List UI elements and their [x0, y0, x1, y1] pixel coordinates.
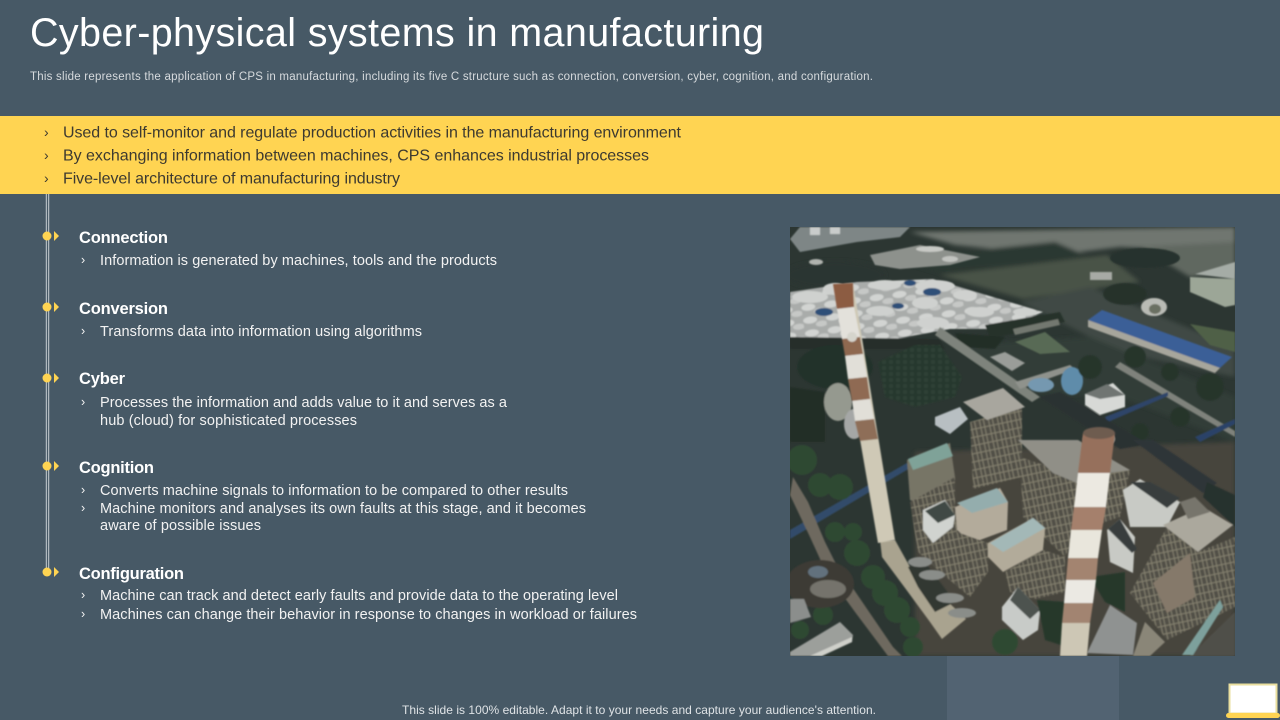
photo: aerial view of industrial plant	[785, 227, 1235, 657]
detail text: ›	[81, 395, 85, 409]
detail text: Machines can change their behavior in response to changes in workload or failures	[100, 607, 637, 623]
detail text: ›	[81, 501, 85, 515]
footer tinted rectangle	[947, 656, 1119, 720]
tall center block	[1020, 457, 1080, 557]
right trees	[1078, 346, 1224, 441]
section: cyber	[42, 370, 508, 429]
silo top rim	[1082, 436, 1116, 444]
lawn	[1015, 332, 1070, 354]
heading: Configuration	[79, 565, 184, 583]
heading: Connection	[79, 229, 168, 247]
left ground: tree clumps	[787, 445, 1018, 657]
key point 1: ›	[44, 124, 49, 140]
crane	[1182, 600, 1223, 655]
timeline marker	[42, 231, 59, 241]
detail text: Processes the information and adds value to it and serves as a	[100, 395, 508, 411]
white house with dark roof	[923, 500, 955, 543]
timeline marker	[42, 461, 59, 471]
filter house C	[988, 518, 1045, 572]
key point 1: Used to self-monitor and regulate production activities in the manufacturing environment	[63, 124, 682, 142]
blue roof	[1088, 310, 1232, 368]
heading: Cyber	[79, 370, 126, 388]
detail text: ›	[81, 324, 85, 338]
white house lower	[1002, 587, 1040, 640]
detail text: ›	[81, 607, 85, 621]
detail text: aware of possible issues	[100, 518, 261, 534]
detail text: Machine can track and detect early faults and provide data to the operating level	[100, 588, 618, 604]
key point 3: Five-level architecture of manufacturing industry	[63, 170, 400, 188]
forest block	[878, 345, 962, 407]
filter house B	[955, 488, 1008, 543]
timeline marker	[42, 302, 59, 312]
detail text: Information is generated by machines, tools and the products	[100, 253, 497, 269]
dark roof band	[1059, 393, 1139, 450]
timeline rail	[46, 194, 49, 572]
right white buildings	[1123, 479, 1180, 527]
warehouse roofs	[790, 227, 910, 252]
elevated flue duct	[880, 540, 966, 639]
heading: Cognition	[79, 459, 154, 477]
detail text: Transforms data into information using algorithms	[100, 324, 422, 340]
timeline marker	[42, 373, 59, 383]
dark green yard	[1037, 600, 1067, 647]
silver lower building	[1087, 605, 1137, 655]
small white building	[1085, 383, 1125, 415]
chimney right	[1060, 427, 1115, 656]
section: conversion	[42, 300, 422, 340]
title: Cyber-physical systems in manufacturing	[30, 11, 764, 55]
detail text	[81, 588, 637, 623]
panel: yellow key points band	[0, 116, 1280, 194]
subtitle: This slide represents the application of CPS in manufacturing, including its five C structure such as connection, conversion, cyber, cognition, and configuration.	[30, 71, 873, 83]
bale pile field	[790, 279, 1043, 345]
left sheds	[790, 599, 811, 623]
key point 2: ›	[44, 147, 49, 163]
footer note: This slide is 100% editable. Adapt it to your needs and capture your audience's attention.	[402, 703, 876, 717]
key point 2: By exchanging information between machines, CPS enhances industrial processes	[63, 148, 649, 164]
detail text: hub (cloud) for sophisticated processes	[100, 413, 357, 429]
section: connection	[42, 229, 497, 269]
support lattice	[910, 477, 988, 597]
detail text: Converts machine signals to information to be compared to other results	[100, 483, 568, 499]
detail text: ›	[81, 253, 85, 267]
plant building top right	[1190, 277, 1235, 307]
scrap yard	[786, 560, 854, 608]
detail text	[81, 483, 586, 534]
blue tanks	[1061, 367, 1083, 395]
icon: laptop	[1226, 684, 1280, 718]
left path	[790, 477, 902, 656]
section: cognition	[42, 459, 586, 534]
tree rows by the piles	[790, 337, 945, 349]
filter house A	[906, 442, 956, 502]
right tower lattice	[1130, 527, 1235, 640]
detail text: Machine monitors and analyses its own faults at this stage, and it becomes	[100, 501, 586, 517]
heading: Conversion	[79, 300, 168, 318]
blue conveyors	[1105, 392, 1168, 422]
key point 3: ›	[44, 170, 49, 186]
detail text: ›	[81, 483, 85, 497]
main building, roof and lattice	[970, 407, 1022, 489]
distant fields	[912, 227, 1235, 656]
timeline marker	[42, 567, 59, 577]
detail text	[81, 395, 508, 429]
section: configuration	[42, 565, 637, 623]
grey tanks	[824, 383, 852, 421]
detail text: ›	[81, 588, 85, 602]
chimney left	[833, 283, 895, 543]
pipe roads	[935, 327, 1040, 402]
